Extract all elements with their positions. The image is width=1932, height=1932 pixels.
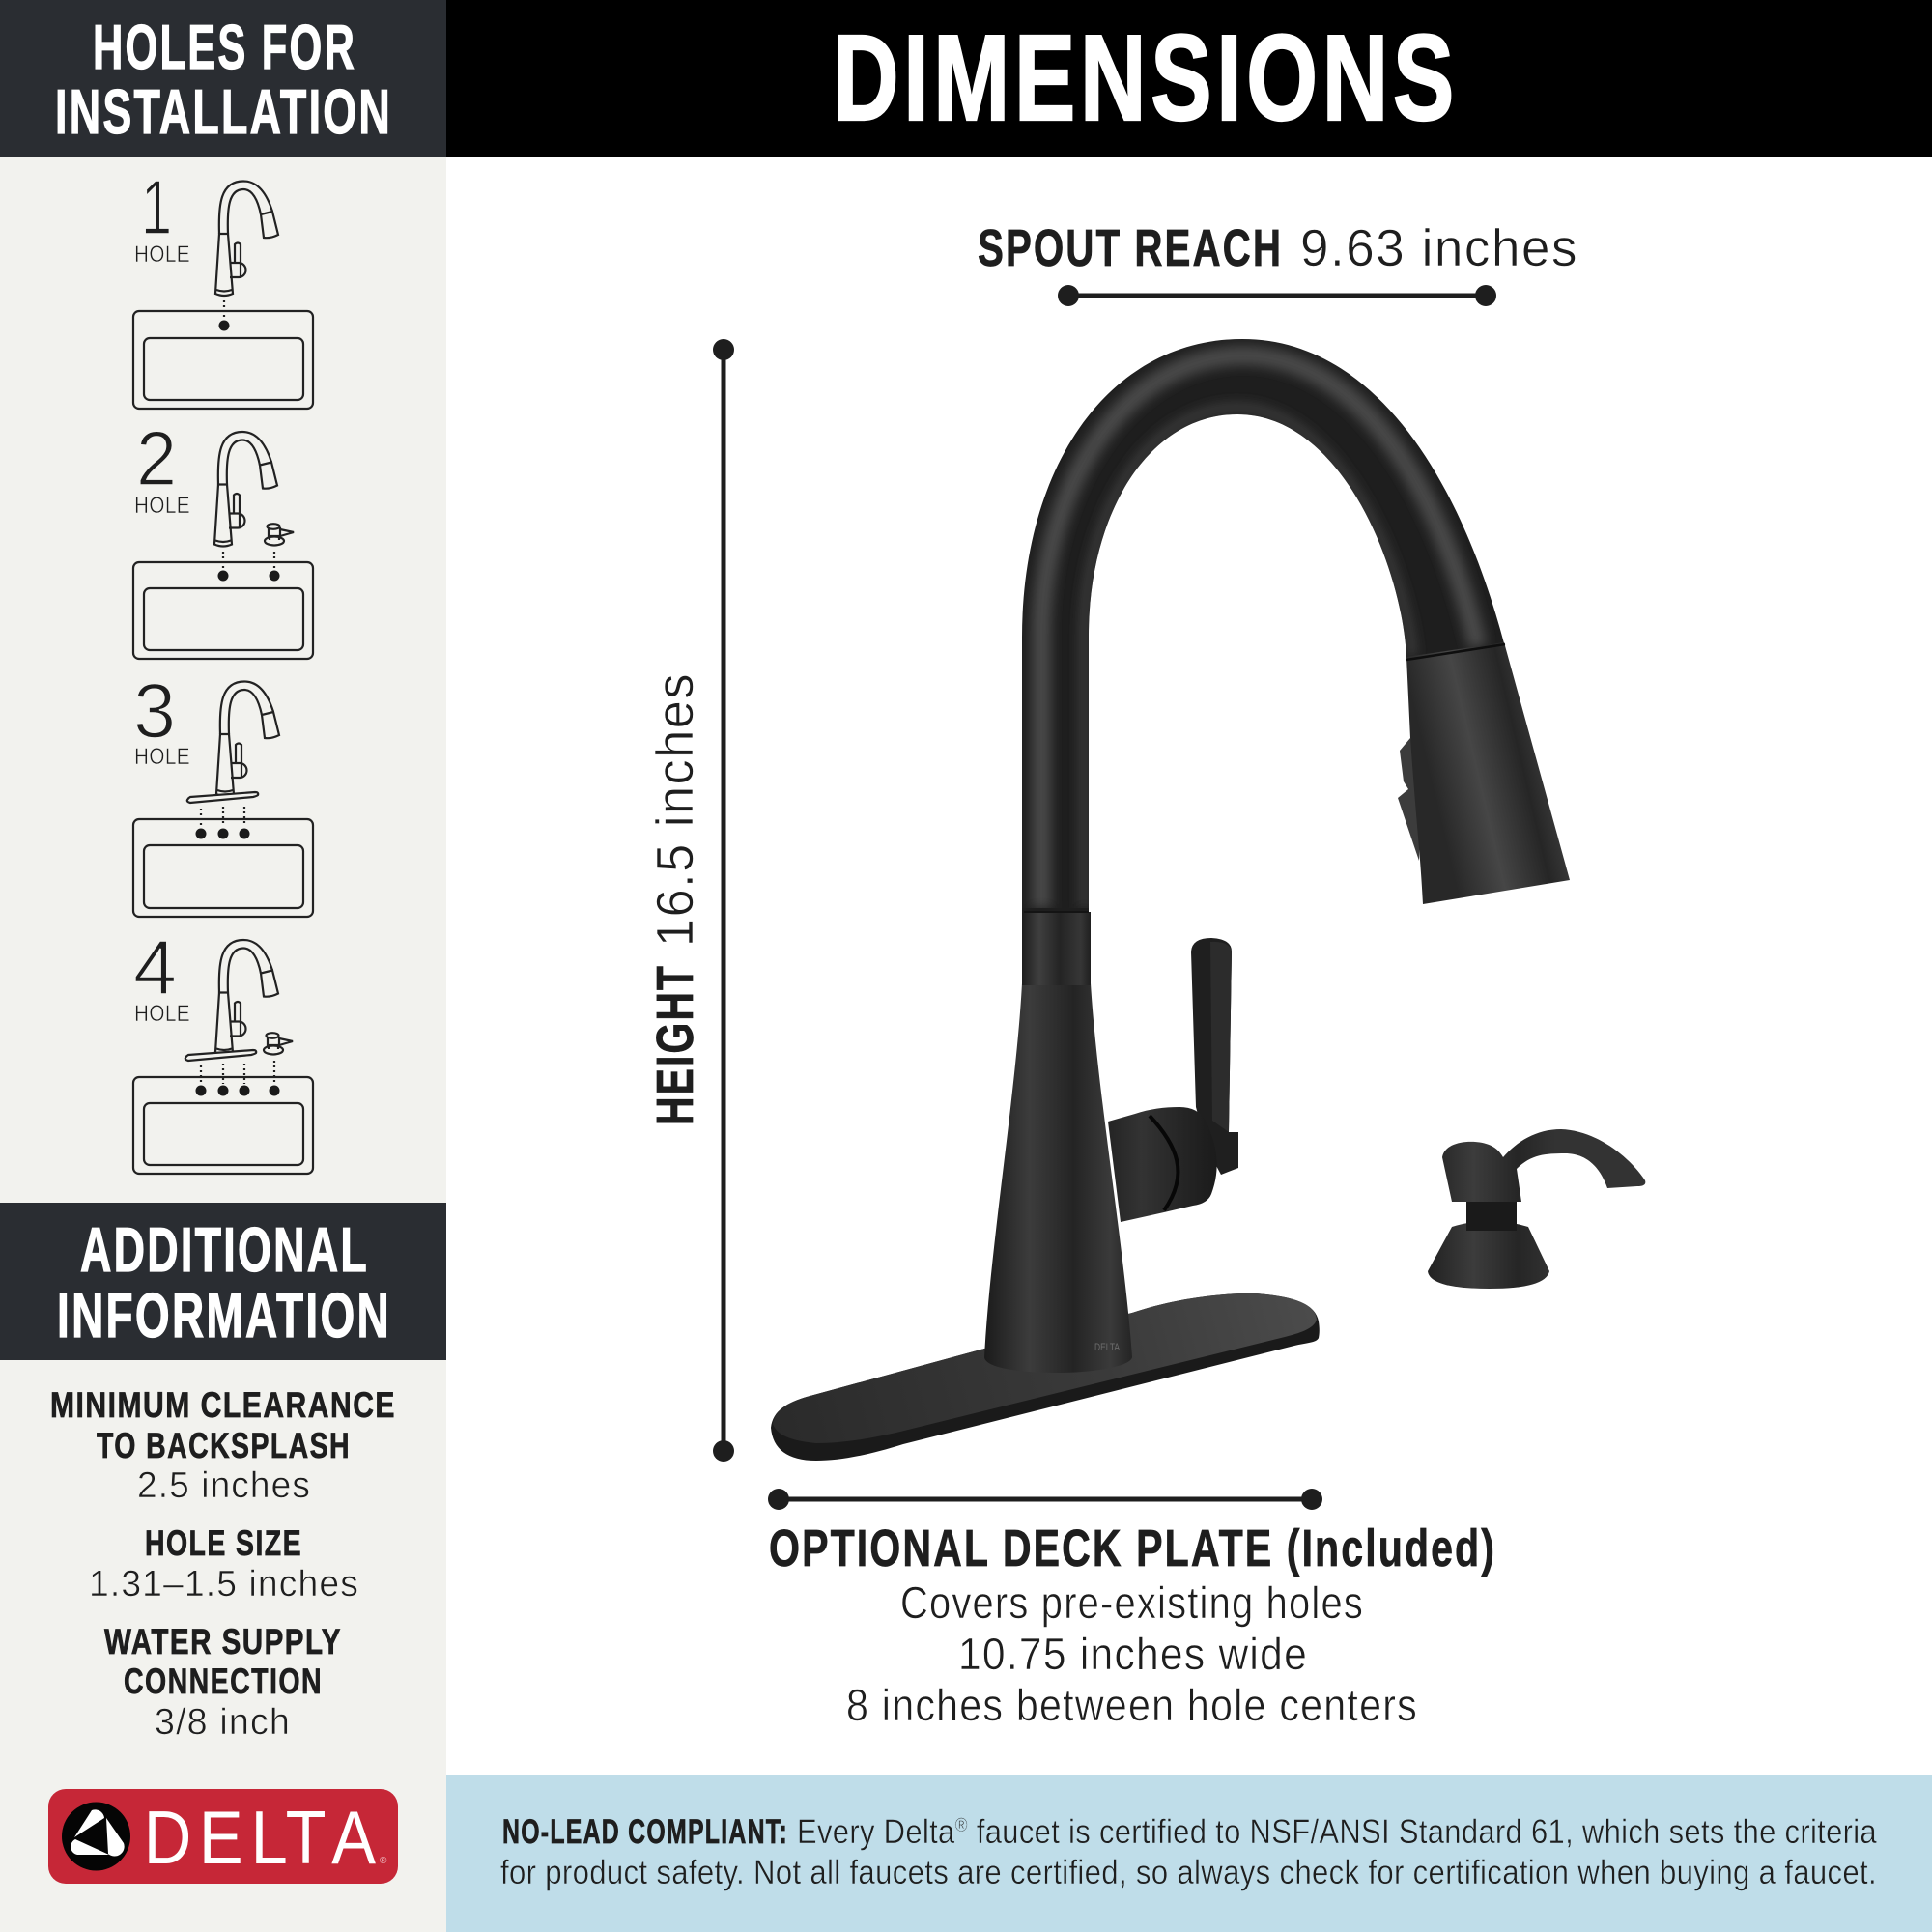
text block: water supply connection: CONNECTION: [124, 1662, 323, 1701]
lever handle: [1108, 938, 1238, 1222]
pull-down spray head: [1398, 642, 1570, 904]
heading banner: holes for installation: INSTALLATION: [55, 76, 392, 147]
gooseneck spout: [1022, 339, 1504, 985]
measure: optional deck plate: [768, 1489, 1496, 1730]
text block: water supply connection: WATER SUPPLY: [104, 1622, 342, 1662]
install option: 3 hole: [133, 668, 313, 917]
panel: no-lead compliance note: NO-LEAD COMPLIANT:: [502, 1813, 788, 1851]
panel: no-lead compliance note: ®: [955, 1815, 968, 1836]
install option: 2 hole: 2: [136, 415, 177, 501]
deck plate: [771, 1293, 1320, 1461]
install option: 3 hole: HOLE: [134, 744, 190, 770]
text block: minimum clearance: MINIMUM CLEARANCE: [50, 1385, 396, 1425]
heading banner: additional information: ADDITIONAL: [80, 1214, 369, 1285]
install option: 4 hole: HOLE: [134, 1001, 190, 1027]
heading banner: additional information: [0, 1203, 446, 1360]
install option: 1 hole: HOLE: [134, 242, 190, 268]
text block: hole size: 1.31–1.5 inches: [89, 1564, 359, 1605]
text block: minimum clearance: 2.5 inches: [137, 1465, 311, 1506]
body collar seam: [1022, 981, 1091, 983]
panel: left sidebar: [0, 157, 446, 1932]
measure: optional deck plate: Covers pre-existing holes: [900, 1577, 1364, 1628]
install option: 3 hole: 3: [133, 668, 176, 753]
measure: spout reach: SPOUT REACH: [978, 219, 1283, 277]
measure: optional deck plate: 8 inches between hole centers: [846, 1680, 1418, 1730]
measure: height: [646, 339, 734, 1462]
logo: Delta: ®: [380, 1856, 387, 1866]
heading banner: holes for installation: HOLES FOR: [93, 12, 356, 82]
install option: 2 hole: HOLE: [134, 493, 190, 519]
title banner: dimensions: DIMENSIONS: [833, 10, 1459, 146]
text block: hole size: HOLE SIZE: [145, 1523, 302, 1563]
install option: 1 hole: 1: [141, 164, 172, 250]
text block: water supply connection: 3/8 inch: [155, 1702, 291, 1743]
body logo: DELTA: [1094, 1342, 1121, 1353]
panel: no-lead compliance note: [446, 1775, 1932, 1932]
logo: Delta: [48, 1789, 398, 1884]
faucet body: [984, 983, 1132, 1373]
install option: 1 hole: [133, 164, 313, 409]
measure: height: HEIGHT: [646, 964, 704, 1125]
panel: no-lead compliance note: Every Delta: [797, 1813, 976, 1851]
text block: hole size: [89, 1523, 359, 1605]
text block: water supply connection: [104, 1622, 342, 1743]
measure: optional deck plate: OPTIONAL DECK PLATE (Included): [769, 1520, 1496, 1577]
install option: 4 hole: [133, 924, 313, 1174]
heading banner: holes for installation: [0, 0, 446, 157]
measure: optional deck plate: 10.75 inches wide: [958, 1629, 1308, 1679]
measure: spout reach: [978, 219, 1578, 306]
product: soap dispenser: [1428, 1129, 1645, 1289]
text block: minimum clearance: TO BACKSPLASH: [97, 1426, 351, 1465]
logo: Delta: DELTA: [144, 1795, 376, 1880]
measure: spout reach: 9.63 inches: [1300, 219, 1578, 277]
install option: 4 hole: 4: [133, 924, 177, 1010]
title banner: dimensions: [446, 0, 1932, 157]
product: kitchen faucet: [771, 339, 1570, 1461]
install option: 2 hole: [133, 415, 313, 659]
heading banner: additional information: INFORMATION: [57, 1280, 391, 1350]
text block: minimum clearance: [50, 1385, 396, 1506]
measure: height: 16.5 inches: [646, 672, 704, 947]
